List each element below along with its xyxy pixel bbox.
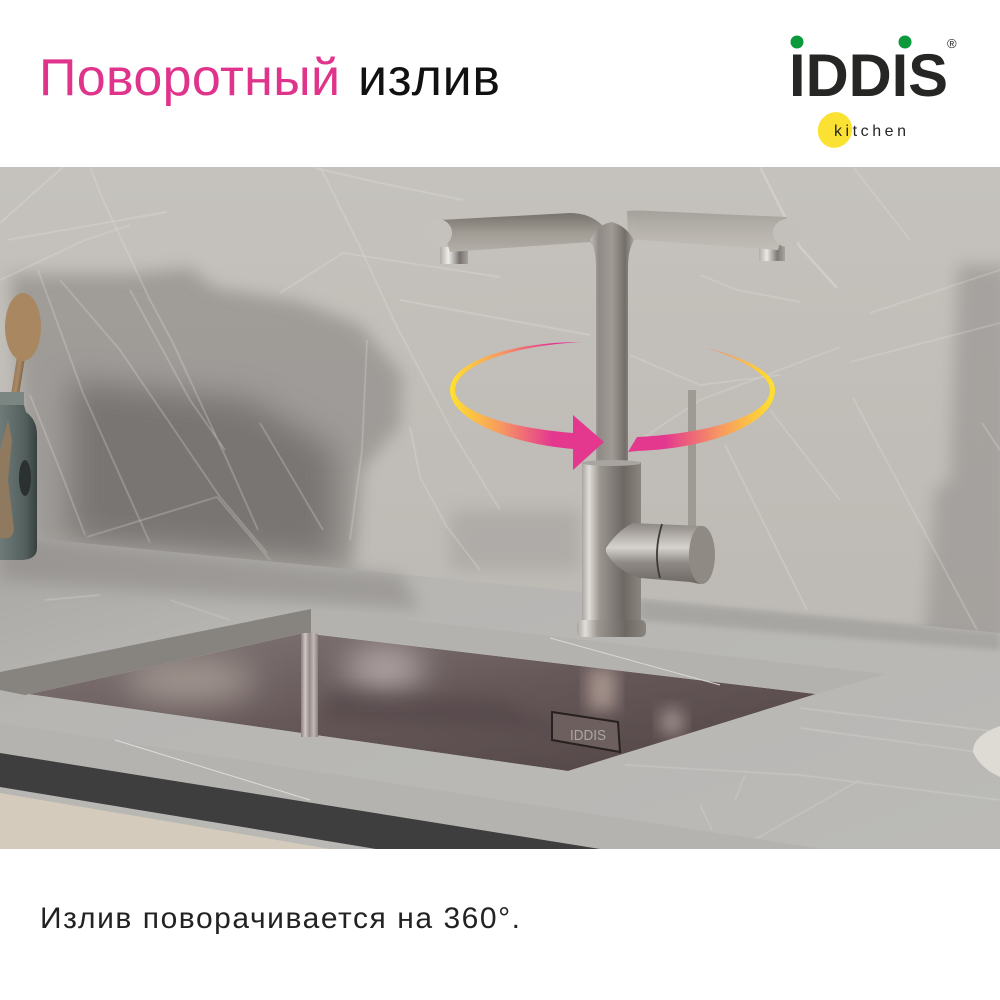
jar with spoon	[0, 293, 41, 560]
logo: IDDIS kitchen: kitchen	[834, 123, 906, 140]
countertop	[0, 535, 1000, 849]
marble wall	[0, 167, 1000, 647]
rotation arrow	[450, 342, 775, 470]
plate	[973, 726, 1000, 777]
arrow: right sweep	[628, 348, 775, 452]
faucet: lever	[688, 390, 696, 528]
title: излив	[358, 49, 500, 107]
sink: basin interior	[0, 633, 816, 771]
beige cabinet front	[0, 793, 330, 849]
faucet: left spout	[440, 213, 602, 264]
sink	[0, 609, 885, 849]
title	[39, 49, 500, 107]
faucet: vertical pipe	[590, 222, 634, 462]
sink: corner seam	[301, 633, 318, 737]
caption: Излив поворачивается на 360°.	[40, 902, 520, 935]
logo: IDDIS kitchen: ®	[947, 36, 957, 51]
faucet: foot	[577, 620, 646, 637]
logo: IDDIS kitchen	[789, 36, 957, 153]
faucet: handle	[606, 523, 702, 584]
sink: left rim face	[0, 609, 311, 695]
spoon	[5, 293, 41, 392]
title: Поворотный	[39, 49, 340, 107]
faucet: base	[582, 462, 641, 622]
faucet: handle cap	[689, 526, 715, 584]
sink: back rim face	[314, 633, 814, 694]
faucet: right ghost spout	[627, 210, 801, 261]
dark cabinet band	[0, 753, 600, 849]
arrow: left sweep	[450, 342, 604, 470]
counter front bevel	[634, 820, 757, 849]
sink: logo badge: IDDIS	[570, 727, 606, 744]
logo: IDDIS kitchen: IDDIS	[789, 42, 948, 109]
faucet	[424, 210, 801, 637]
photo: kitchen sink scene	[0, 167, 1000, 849]
sink: logo badge	[552, 712, 620, 752]
